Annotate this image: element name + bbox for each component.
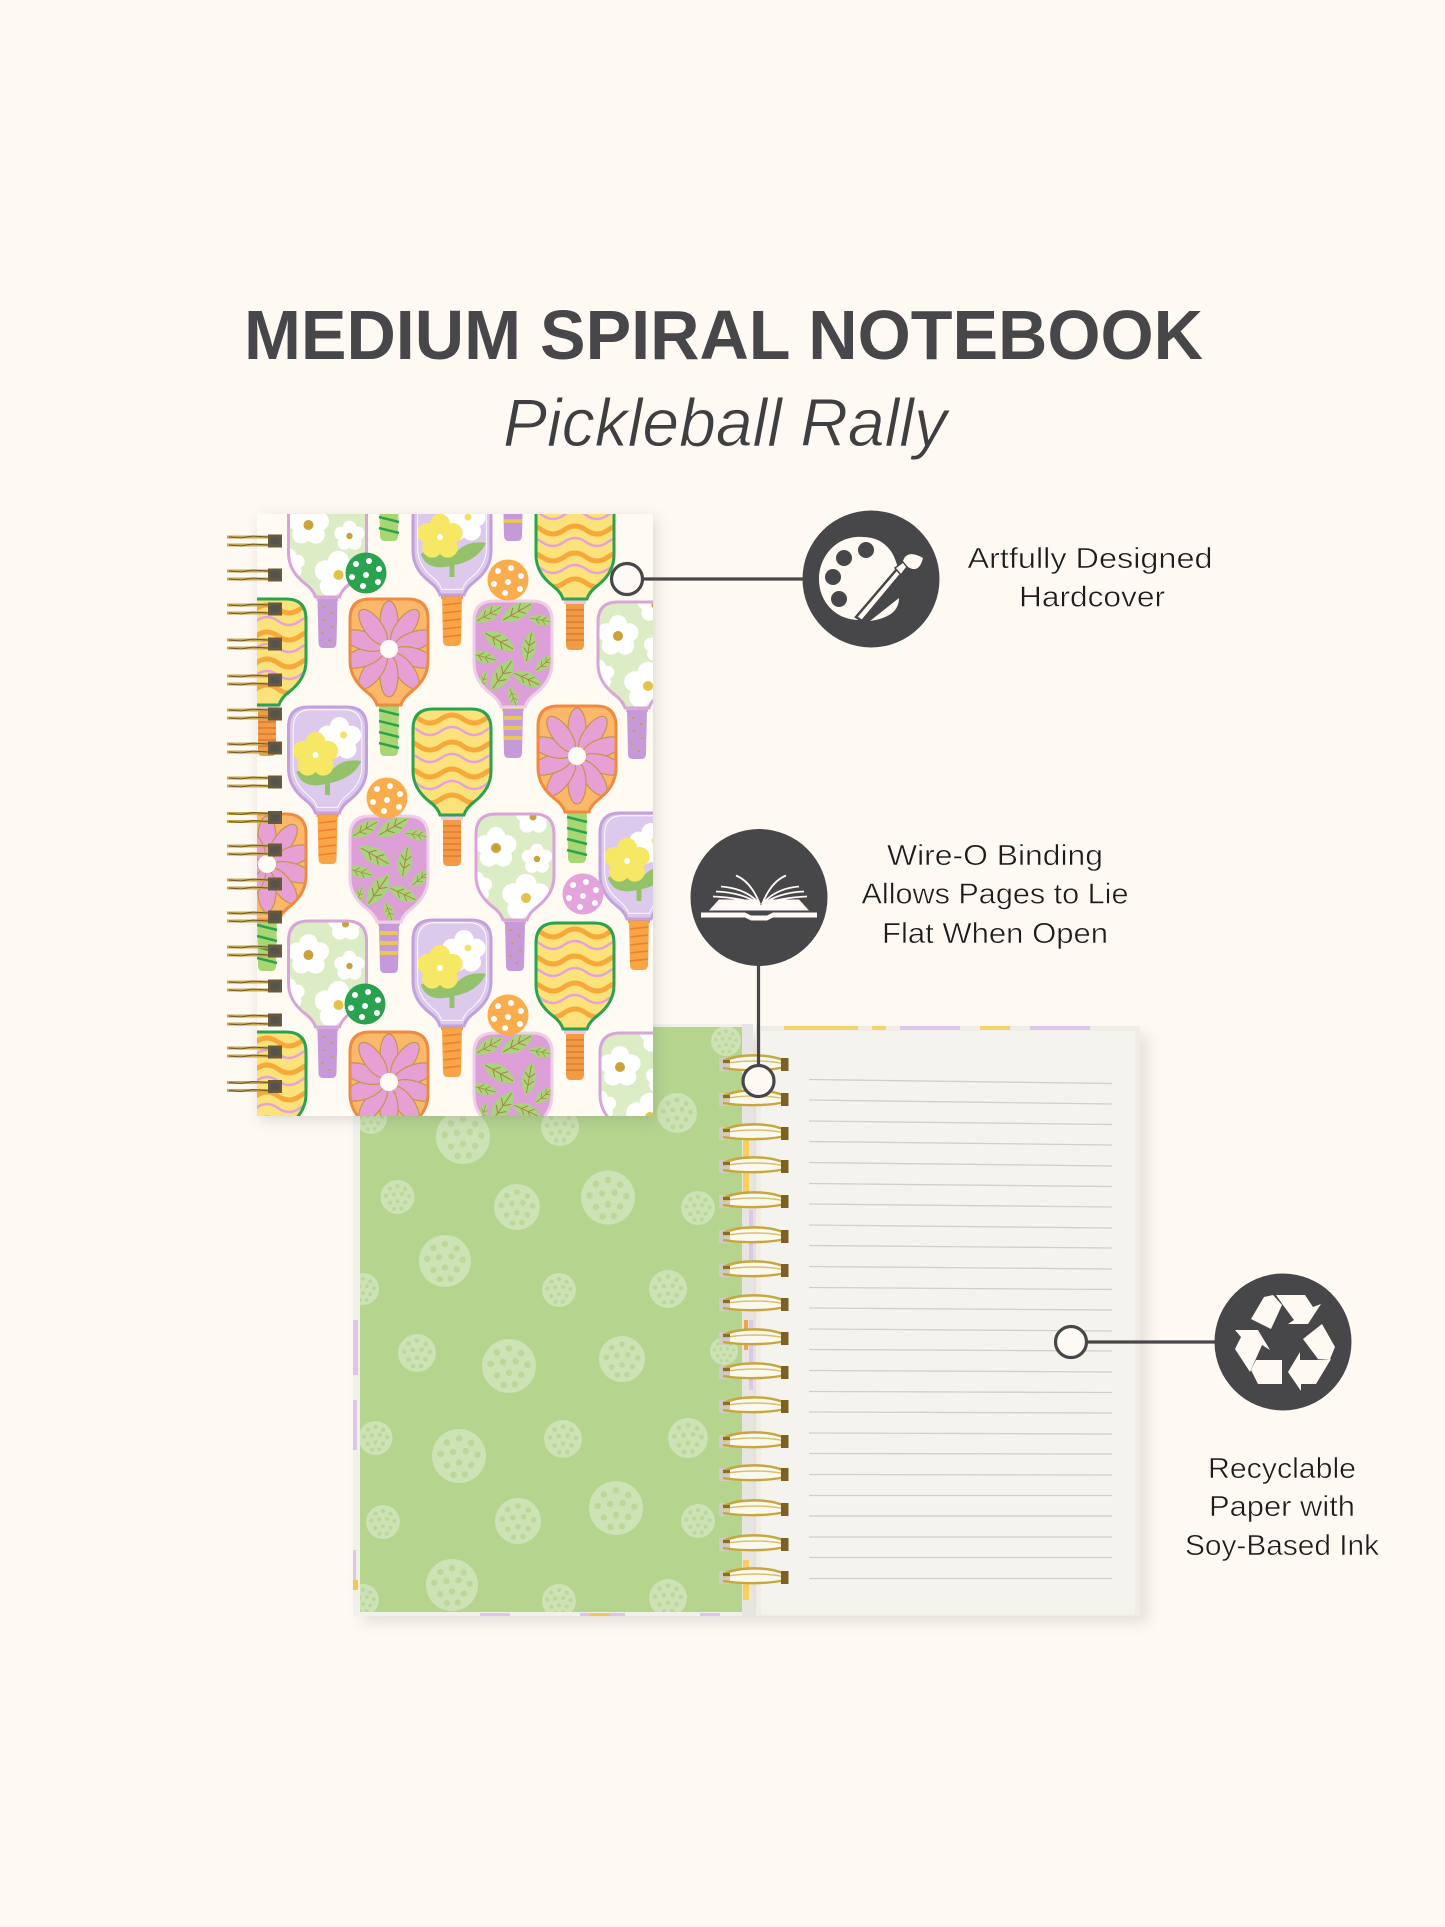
closed notebook shadow [260,518,656,1120]
spine strip [742,1024,753,1616]
closed spiral binding [227,534,282,1093]
callout: hardcover [612,510,1212,648]
caption: Artfully Designed [968,543,1212,575]
connector line [1087,1340,1220,1344]
caption: Recyclable [1208,1453,1356,1485]
icon: recycling arrows [1214,1274,1352,1410]
caption: Flat When Open [882,918,1108,950]
icon: palette and brush [802,510,940,648]
patterned cover [257,514,653,1116]
marker [1056,1326,1086,1358]
caption: Wire-O Binding [887,840,1103,872]
icon: open book [690,829,828,966]
callout: wire-o binding [690,829,1128,1096]
caption: Soy-Based Ink [1185,1530,1380,1562]
left cover edge [353,1024,745,1616]
marker [612,564,642,594]
open notebook [347,1024,1148,1623]
closed notebook [227,514,660,1124]
green inner cover with pickleball pattern [347,1026,742,1618]
notebook shadow [362,1035,1148,1623]
open wire-o binding [719,1055,788,1584]
title: MEDIUM SPIRAL NOTEBOOK [244,296,1203,374]
lined paper page [761,1031,1135,1614]
caption: Hardcover [1019,582,1165,614]
connector line [757,950,760,1066]
callout: recyclable [1056,1274,1380,1562]
subtitle: Pickleball Rally [503,385,951,461]
caption: Paper with [1209,1491,1355,1523]
connector line [643,577,810,581]
right cover edge [756,1026,1140,1616]
caption: Allows Pages to Lie [862,878,1128,910]
marker [743,1066,774,1096]
